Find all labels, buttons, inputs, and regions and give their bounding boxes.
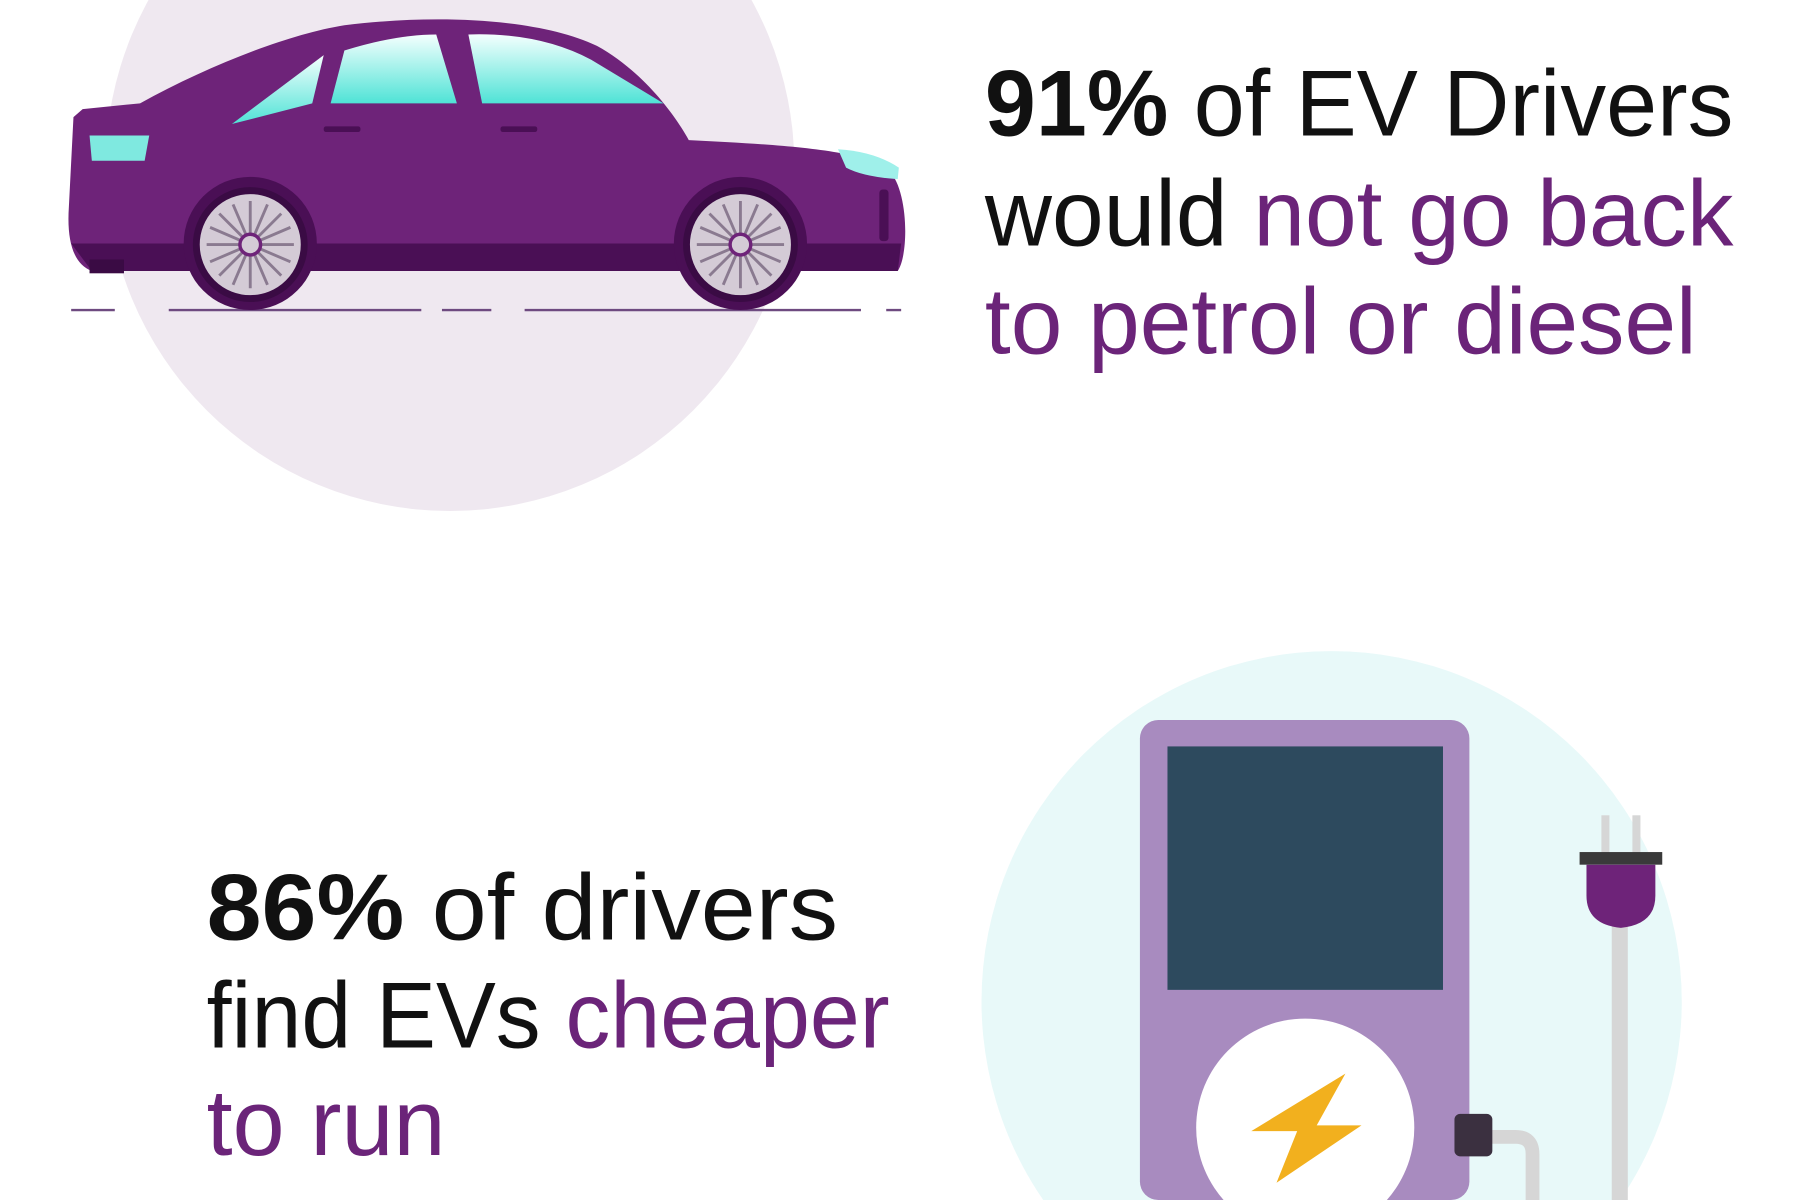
background circle: car <box>106 0 794 511</box>
icon: charging station <box>1140 720 1662 1200</box>
text: 91% statistic <box>984 50 1734 374</box>
text: 86% statistic: to run <box>207 1070 445 1175</box>
background circle: charger <box>982 651 1682 1200</box>
text: 86% statistic <box>208 872 888 1156</box>
text: 86% statistic: 86% of drivers <box>207 854 838 959</box>
text: 86% statistic: find EVs cheaper <box>207 962 890 1067</box>
text: 91% statistic: to petrol or diesel <box>985 269 1697 374</box>
icon: car <box>68 19 905 310</box>
text: 91% statistic: would not go back <box>984 161 1734 266</box>
text: 91% statistic: 91% of EV Drivers <box>985 50 1733 156</box>
